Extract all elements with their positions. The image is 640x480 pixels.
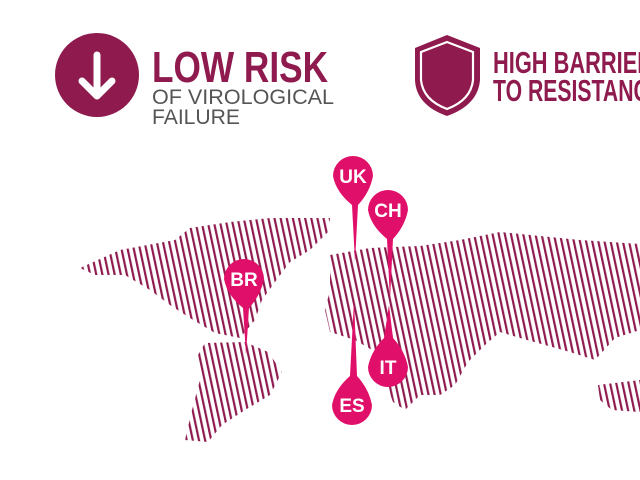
icon: shield <box>415 35 480 116</box>
pin: CH: CH <box>374 201 402 222</box>
world map <box>80 218 640 442</box>
pin: ES: ES <box>339 396 365 417</box>
pin: BR: BR <box>230 270 258 291</box>
pin: CH <box>368 190 408 300</box>
pin: UK <box>333 156 373 262</box>
pin: IT <box>368 305 408 387</box>
pin: ES <box>332 300 372 425</box>
heading: low risk: OF VIROLOGICAL <box>152 86 334 109</box>
pin: UK: UK <box>339 167 367 188</box>
heading: high barrier <box>493 45 640 108</box>
icon: down arrow circle <box>55 33 139 117</box>
pin: IT: IT <box>380 358 397 379</box>
heading: low risk: FAILURE <box>152 106 240 129</box>
pin: BR <box>224 259 264 355</box>
heading: low risk <box>152 43 334 129</box>
heading: low risk: LOW RISK <box>152 43 328 92</box>
